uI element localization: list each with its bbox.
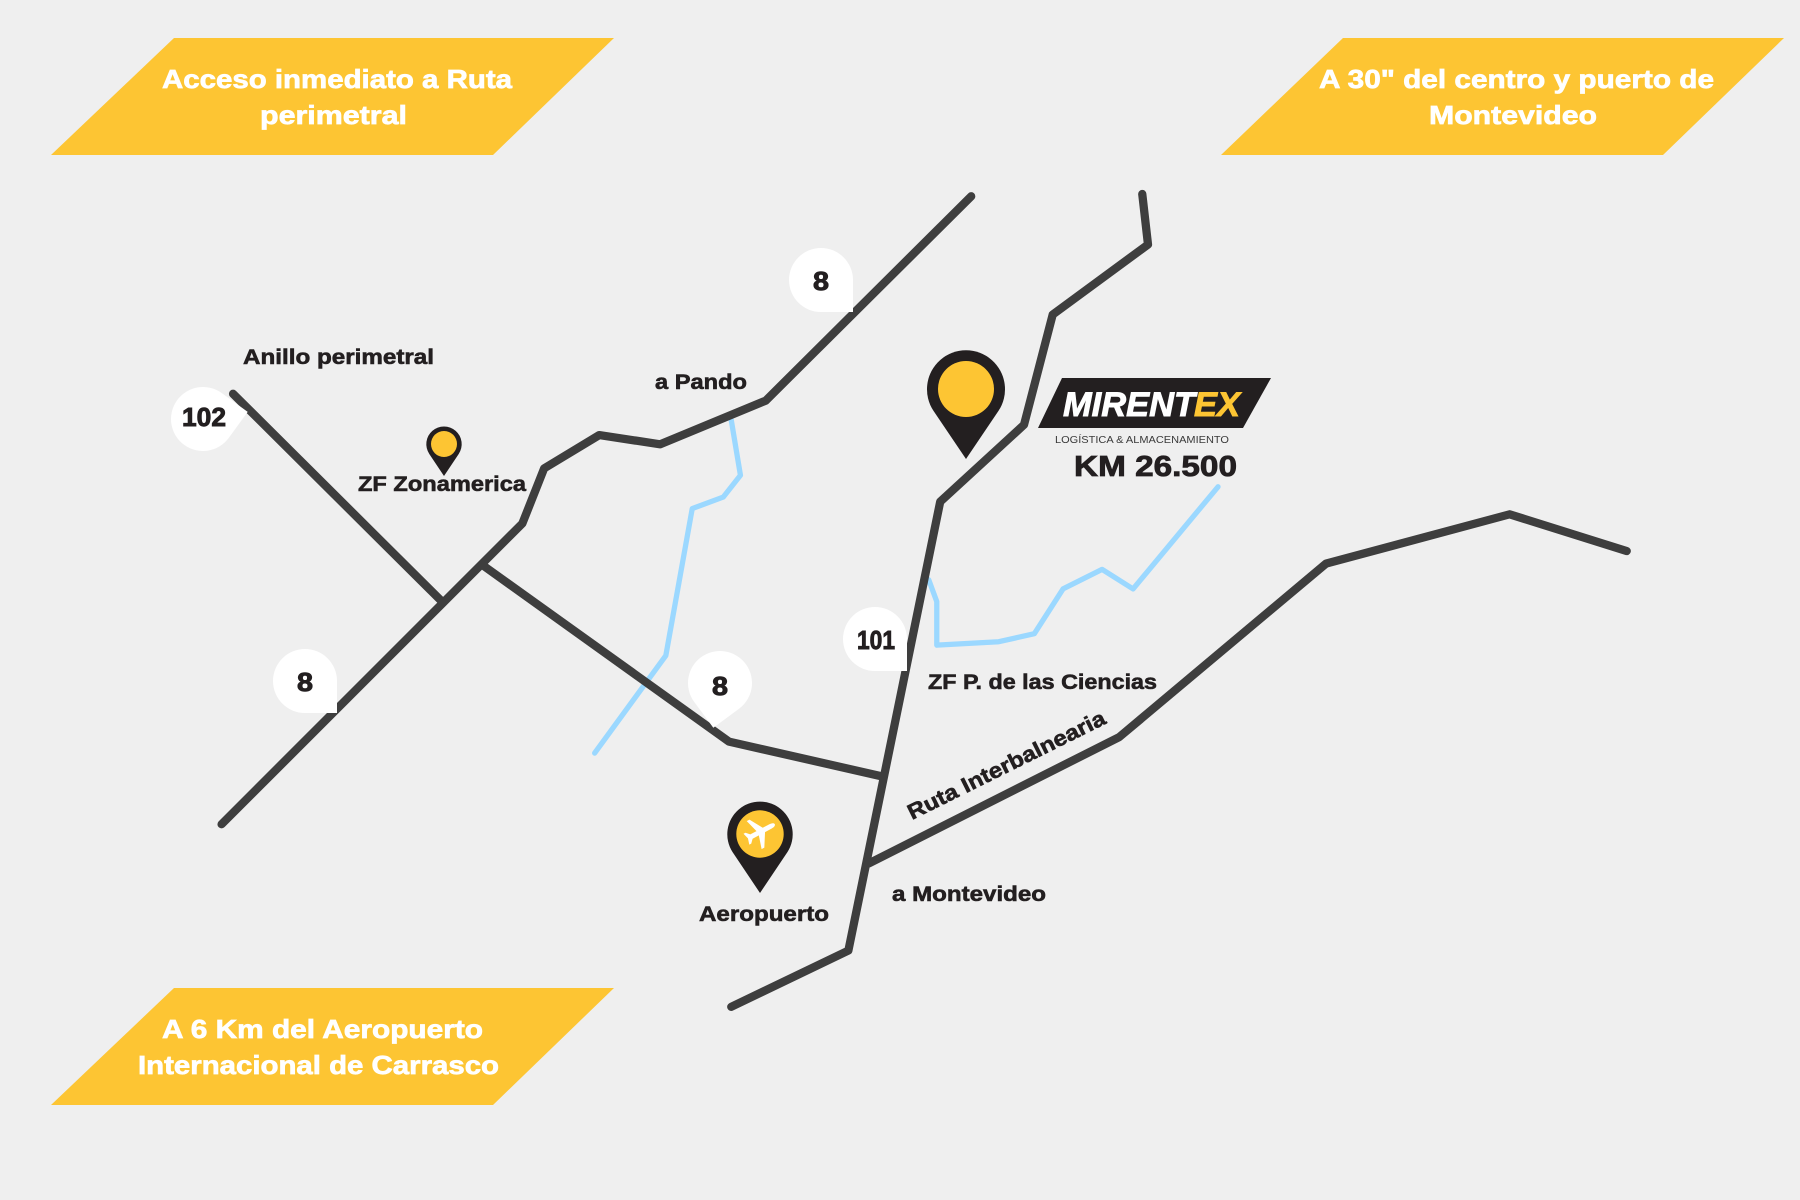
label: KM 26.500: KM 26.500 (1074, 451, 1237, 483)
banner: centro y puerto de Montevideo: Montevideo (1429, 100, 1597, 130)
route marker 8 south (675, 638, 765, 728)
road network (222, 194, 1627, 1007)
banner: centro y puerto de Montevideo (1221, 38, 1784, 155)
rivers (595, 420, 1218, 753)
route marker 8 south: 8 (712, 671, 728, 701)
banner: acceso a ruta perimetral (51, 38, 614, 155)
route marker 101: 101 (857, 625, 895, 655)
route marker 8 north: 8 (813, 266, 829, 296)
route marker 8 west (273, 649, 337, 713)
logo: Mirentex: MIRENT (1063, 386, 1198, 424)
pin: ZF Zonamerica (426, 426, 462, 476)
label: ZF P. de las Ciencias: ZF P. de las Ciencias (928, 670, 1157, 694)
icon: airplane (739, 810, 782, 853)
label: a Pando: a Pando (655, 370, 747, 394)
route marker 101 (843, 607, 907, 671)
banner: aeropuerto de Carrasco: A 6 Km del Aeropuerto (162, 1014, 483, 1044)
logo: Mirentex: LOGÍSTICA & ALMACENAMIENTO (1055, 433, 1229, 446)
banner: acceso a ruta perimetral: Acceso inmediato a Ruta (162, 64, 513, 94)
label: ZF Zonamerica: ZF Zonamerica (358, 472, 527, 496)
label: Anillo perimetral: Anillo perimetral (243, 345, 434, 369)
banner: centro y puerto de Montevideo: A 30" del centro y puerto de (1319, 64, 1714, 94)
route marker 102: 102 (182, 402, 226, 432)
banner: aeropuerto de Carrasco (51, 988, 614, 1105)
route marker 8 west: 8 (297, 667, 313, 697)
label: Aeropuerto: Aeropuerto (699, 902, 829, 926)
route marker 8 north (789, 248, 853, 312)
logo: Mirentex (1038, 378, 1271, 446)
logo: Mirentex: EX (1194, 386, 1242, 424)
pin: Aeropuerto (727, 802, 793, 893)
label: Ruta Interbalnearia: Ruta Interbalnearia (904, 706, 1111, 824)
label: a Montevideo: a Montevideo (892, 882, 1046, 906)
banner: acceso a ruta perimetral: perimetral (260, 100, 407, 130)
pin: Mirentex (927, 350, 1005, 459)
banner: aeropuerto de Carrasco: Internacional de Carrasco (138, 1050, 499, 1080)
route marker 102 (158, 374, 248, 464)
